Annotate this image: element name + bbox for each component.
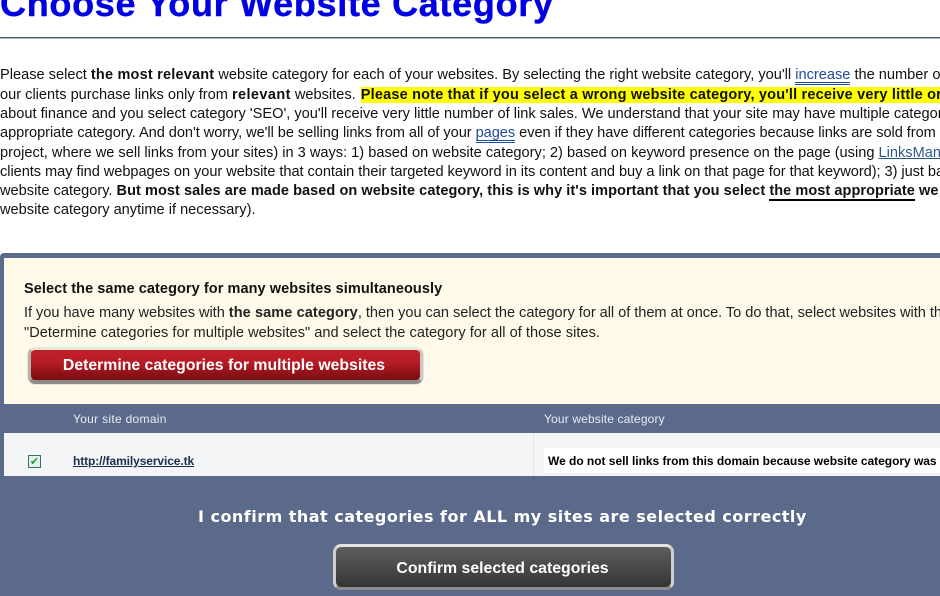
title rule [0,37,940,39]
notice text [24,305,940,341]
notice text: "Determine categories for multiple websites" and select the category for all of those sites. [24,325,600,341]
button: determine categories [28,347,423,383]
intro text: Please select the most relevant website category for each of your websites. By selecting the right website category, you'll the number of [0,67,940,83]
table row [4,433,940,476]
notice text: If you have many websites with the same category, then you can select the category for all of them at once. To do that, select websites with the [24,305,940,321]
intro text: increase [795,67,850,83]
column header: your site domain: Your site domain [73,412,167,426]
intro text: pages [476,125,515,141]
button: confirm selected categories [333,544,674,590]
column divider [533,433,534,476]
icon: checkbox: ✔ [30,455,39,468]
panel: notice box [4,258,940,404]
intro text [0,67,940,218]
site link: http://familyservice.tk [73,454,194,468]
intro text: our clients purchase links only from relevant websites. Please note that if you select a wrong website category, you'll receive very little or no [0,87,940,103]
intro text: about finance and you select category 'SEO', you'll receive very little number of link sales. We understand that your site may have multiple categories [0,106,940,122]
panel: category form [0,253,940,596]
intro text: clients may find webpages on your website that contain their targeted keyword in its content and buy a link on that page for that keyword); 3) just ba [0,164,940,180]
column header: your website category: Your website category [544,412,665,426]
confirmation text: I confirm that categories for ALL my sites are selected correctly [198,507,807,526]
button: confirm selected categories: Confirm selected categories [396,560,609,577]
intro text: website category anytime if necessary). [0,202,256,218]
category status [544,448,940,473]
intro text: website category. But most sales are made based on website category, this is why it's important that you select the most appropriate we [0,183,939,199]
button: determine categories: Determine categories for multiple websites [63,357,385,374]
notice heading: Select the same category for many websites simultaneously [24,281,442,297]
intro text: appropriate category. And don't worry, we'll be selling links from all of your even if they have different categories because links are sold from [0,125,936,141]
